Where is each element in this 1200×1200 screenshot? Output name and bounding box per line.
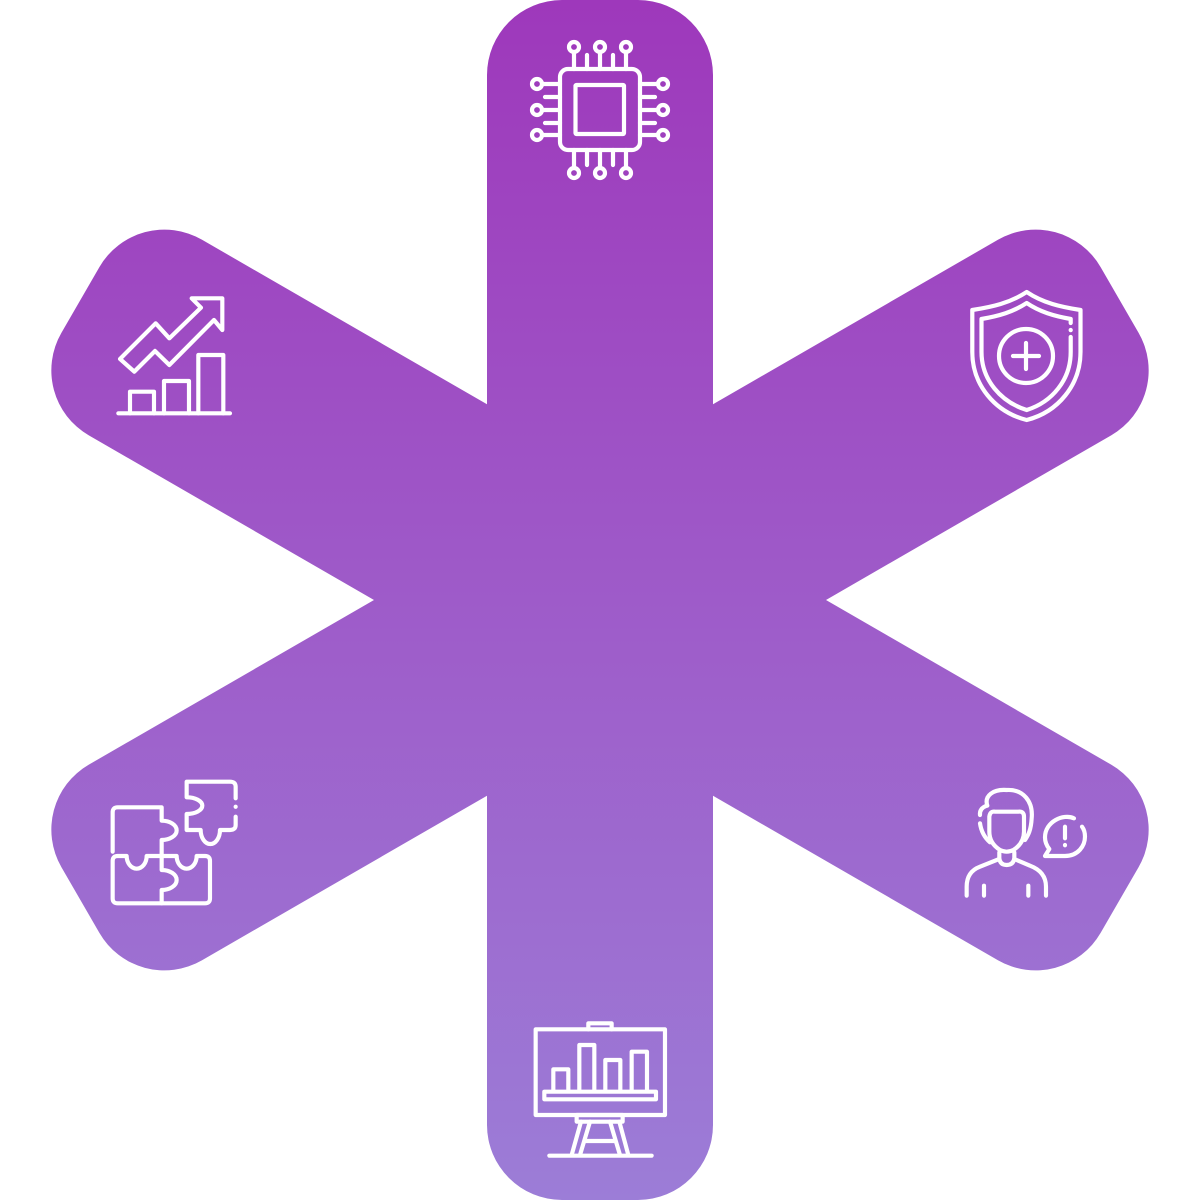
icon: microchip: [532, 42, 668, 178]
icon: presentation board with bar chart: [536, 1023, 665, 1156]
icon: growth chart with arrow: [118, 298, 230, 413]
icon: puzzle pieces: [113, 782, 236, 903]
icon: shield with plus: [972, 292, 1080, 420]
icon: person with alert speech bubble: [967, 790, 1085, 896]
